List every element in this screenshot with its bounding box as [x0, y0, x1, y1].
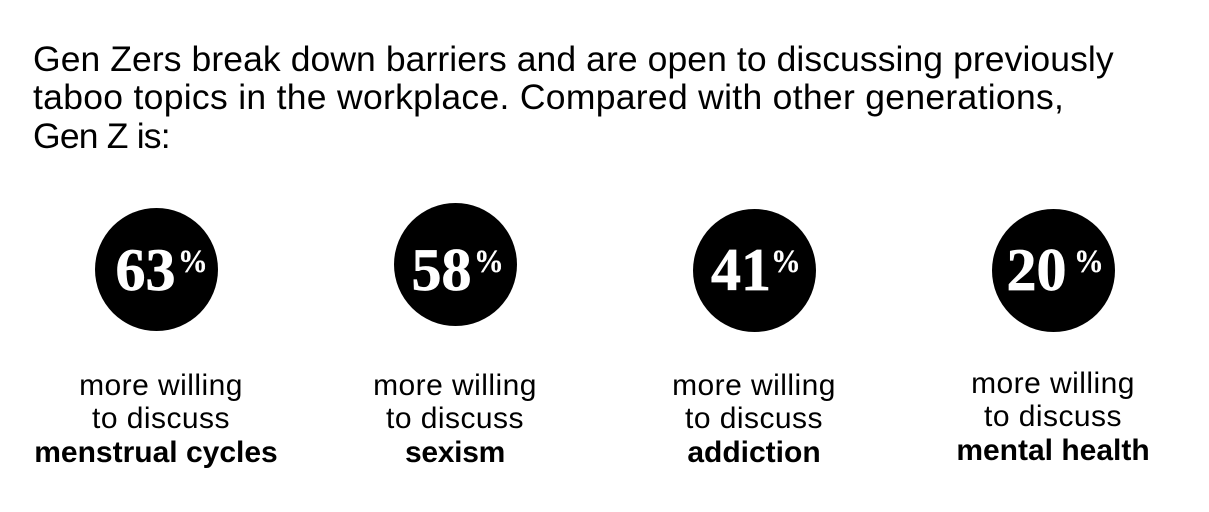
caption: menstrual cycles: menstrual cycles: [34, 436, 278, 469]
caption: sexism: [373, 369, 537, 469]
stat circle: 58%: [394, 203, 517, 326]
title: taboo topics in the workplace. Compared with other generations,: [33, 77, 1064, 117]
stat circle: 41%: 41: [711, 237, 771, 303]
stat circle: 20%: 20: [1006, 237, 1066, 303]
caption: sexism: to discuss: [386, 402, 524, 435]
caption: mental health: [956, 367, 1150, 467]
caption: mental health: to discuss: [984, 400, 1122, 433]
stat circle: 63%: 63: [116, 237, 176, 303]
stat circle: 58%: %: [474, 244, 504, 280]
stat circle: 63%: [95, 208, 218, 331]
caption: addiction: addiction: [687, 436, 821, 469]
stat circle: 41%: [693, 209, 816, 332]
caption: mental health: mental health: [956, 434, 1150, 467]
title: Gen Zers break down barriers and are open to discussing previously: [33, 38, 1114, 78]
caption: menstrual cycles: to discuss: [92, 402, 230, 435]
caption: addiction: more willing: [672, 369, 836, 402]
caption: sexism: sexism: [405, 436, 505, 469]
stat circle: 63%: %: [178, 244, 207, 280]
stat circle: 20%: %: [1074, 244, 1103, 280]
caption: sexism: more willing: [373, 369, 537, 402]
stat circle: 20%: [992, 209, 1115, 332]
caption: menstrual cycles: [34, 369, 278, 469]
title: Gen Z is:: [33, 116, 170, 156]
title: [33, 38, 1114, 156]
caption: addiction: to discuss: [685, 402, 823, 435]
caption: menstrual cycles: more willing: [79, 369, 243, 402]
caption: mental health: more willing: [971, 367, 1135, 400]
caption: addiction: [672, 369, 836, 469]
stat circle: 58%: 58: [412, 237, 472, 303]
stat circle: 41%: %: [770, 244, 800, 280]
